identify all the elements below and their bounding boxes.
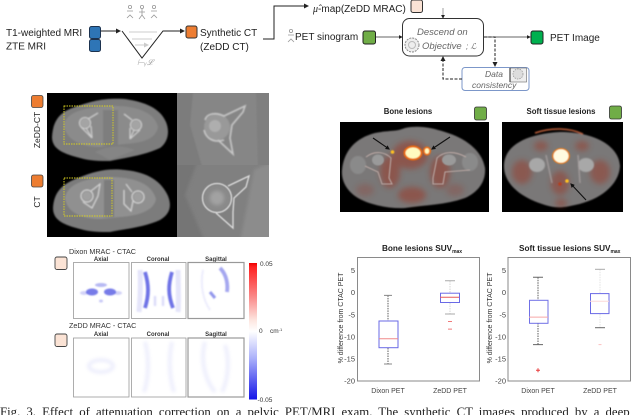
icon: green sinogram square: [363, 31, 376, 44]
text: ZeDD column labels: Axial: [94, 332, 109, 338]
colorbar: [249, 261, 283, 404]
annotation: yellow zoom box CT: [64, 178, 112, 216]
text: bone category labels: [371, 388, 468, 395]
chart frame: [358, 258, 480, 381]
text: descend label: [417, 27, 476, 52]
text: bone tick labels: -15: [344, 354, 355, 364]
chart frame: [508, 258, 630, 381]
map: Dixon coronal: [139, 270, 178, 312]
text: colorbar labels: -1: [279, 327, 283, 332]
text: input MRI labels: ZTE MRI: [6, 42, 46, 52]
text: ZeDD row heading: ZeDD MRAC - CTAC: [69, 321, 136, 330]
text: descend label: Descend on: [417, 27, 468, 38]
text: soft tissue chart title: Soft tissue lesions SUV: [519, 244, 610, 253]
chart: soft tissue lesions boxplot: [487, 244, 630, 395]
panel: data consistency: [462, 68, 529, 90]
text: bone tick labels: -5: [348, 310, 355, 320]
text: soft tissue tick labels: -15: [495, 354, 506, 364]
text: synthetic CT label: Synthetic CT: [200, 28, 257, 39]
icon: v-shaped network: [101, 31, 184, 58]
text: bone chart title: max: [452, 249, 462, 255]
text: data consistency label: [472, 69, 517, 90]
icon: green square bone: [474, 107, 486, 120]
icon: pale square Dixon: [55, 257, 67, 270]
icon: sinogram stick figure: [288, 29, 294, 42]
text: soft tissue category labels: [521, 388, 618, 395]
arrow: sinogram to descent: [376, 36, 402, 38]
arrow: to mu-map: [263, 6, 308, 39]
icon: pale square: [411, 0, 422, 12]
panel: descend on objective: [402, 18, 484, 56]
text: colorbar labels: cm: [270, 328, 279, 335]
pipeline: PET reconstruction: [288, 0, 600, 90]
text: PET image: PET Image: [550, 33, 600, 44]
text: soft tissue tick labels: [495, 266, 506, 386]
pipeline: synthetic CT generation: [6, 5, 308, 67]
text: network loss symbol: ⊢ᵧ𝓛: [137, 58, 155, 67]
panel: attenuation difference maps: [55, 247, 283, 404]
text: bone tick labels: [344, 266, 355, 386]
boxplot: ZeDD PET soft tissue: [590, 269, 609, 345]
text: Dixon row heading: Dixon MRAC - CTAC: [69, 247, 136, 256]
text: input MRI labels: [6, 28, 82, 52]
text: bone chart title: Bone lesions SUV: [382, 244, 452, 253]
image: ZeDD-CT axial: [47, 93, 177, 165]
text: bone tick labels: 0: [351, 288, 355, 297]
icon: stick figures: [127, 5, 157, 19]
image: CT zoomed hip: [177, 165, 269, 237]
map frames ZeDD: [74, 338, 244, 397]
annotation: yellow zoom box ZeDD-CT: [64, 106, 113, 144]
text: synthetic CT label: [200, 28, 257, 53]
text: Dixon column labels: Axial: [94, 257, 109, 263]
icon: dashed circle: [405, 38, 419, 52]
text: bone tick labels: -10: [344, 332, 355, 342]
arrow: dashed data consistency to descent: [443, 57, 462, 79]
image: soft tissue PET/CT: [502, 122, 623, 212]
text: soft tissue category labels: ZeDD PET: [583, 388, 618, 395]
chart: bone lesions boxplot: [338, 244, 480, 395]
text: synthetic CT label: (ZeDD CT): [200, 42, 249, 53]
text: ZeDD column labels: Coronal: [147, 332, 170, 338]
map: Dixon axial: [80, 283, 122, 302]
text: bone tick labels: 5: [351, 266, 355, 275]
icon: orange square: [186, 26, 197, 38]
boxplot: Dixon PET soft tissue: [529, 277, 548, 372]
text: descend label: Objective: [422, 41, 462, 52]
arrow: soft tissue lesion: [571, 184, 586, 200]
image: bone lesions PET/CT: [340, 122, 489, 212]
text: soft tissue lesions heading: Soft tissue lesions: [527, 107, 596, 116]
text: ZeDD column labels: [94, 332, 227, 338]
boxplot: Dixon PET bone: [379, 295, 398, 364]
text: mu-map label: μ̂-map(ZeDD MRAC): [312, 4, 406, 15]
text: colorbar labels: 0: [259, 328, 263, 335]
boxplot: ZeDD PET bone: [440, 281, 460, 329]
icon: PET image square: [531, 31, 543, 44]
text: soft tissue tick labels: -10: [495, 332, 506, 342]
text: colorbar labels: -0.05: [258, 397, 273, 404]
text: bone y-axis label: % difference from CTAC PET: [338, 272, 345, 363]
text: descend label: ; ℒ: [466, 42, 476, 51]
icon: orange square ZeDD-CT: [32, 96, 43, 108]
text: Dixon column labels: Sagittal: [205, 257, 227, 263]
image: CT axial: [47, 165, 177, 237]
text: soft tissue tick labels: -5: [499, 310, 506, 320]
arrow: dashed to data consistency: [484, 37, 495, 66]
text: input MRI labels: T1-weighted MRI: [6, 28, 82, 39]
panel: CT comparison: [32, 88, 275, 242]
text: soft tissue tick labels: 5: [502, 266, 506, 275]
text: data consistency label: Data: [485, 69, 503, 79]
text: ZeDD column labels: Sagittal: [205, 332, 227, 338]
text: soft tissue chart title: max: [610, 249, 621, 255]
icon: sinogram thumbnail: [510, 68, 526, 82]
text: soft tissue y-axis label: % difference from CTAC PET: [487, 272, 494, 363]
text: bone lesions heading: Bone lesions: [384, 107, 433, 116]
text: colorbar labels: [258, 261, 283, 404]
text: colorbar labels: 0.05: [260, 261, 273, 268]
map frames Dixon: [74, 262, 244, 318]
icon: pale square ZeDD: [55, 334, 67, 346]
map: ZeDD differences: [89, 342, 228, 392]
arrow: to PET image: [484, 36, 530, 38]
arrow: right bone lesion: [432, 137, 450, 149]
text: Dixon column labels: [94, 257, 227, 263]
map: Dixon sagittal: [202, 268, 227, 310]
icon: orange square CT: [32, 175, 43, 187]
icon: blue input squares: [90, 26, 100, 52]
text: soft tissue tick labels: 0: [502, 288, 506, 297]
text: soft tissue tick labels: -20: [495, 376, 506, 386]
text: bone tick labels: -20: [344, 376, 355, 386]
text: bone category labels: ZeDD PET: [433, 388, 468, 395]
icon: green square soft tissue: [610, 106, 622, 119]
panel: PET lesions: [340, 106, 623, 212]
text: CT label: CT: [32, 196, 42, 208]
text: soft tissue category labels: Dixon PET: [521, 388, 555, 395]
arrow: left bone lesion: [373, 138, 389, 149]
text: bone category labels: Dixon PET: [371, 388, 405, 395]
text: ZeDD-CT label: ZeDD-CT: [32, 112, 42, 148]
image: ZeDD-CT zoomed hip: [177, 93, 269, 165]
text: PET sinogram: PET sinogram: [295, 32, 358, 43]
arrow: mu-map to descent: [442, 8, 444, 18]
text: data consistency label: consistency: [472, 80, 517, 90]
text: Dixon column labels: Coronal: [147, 257, 170, 263]
